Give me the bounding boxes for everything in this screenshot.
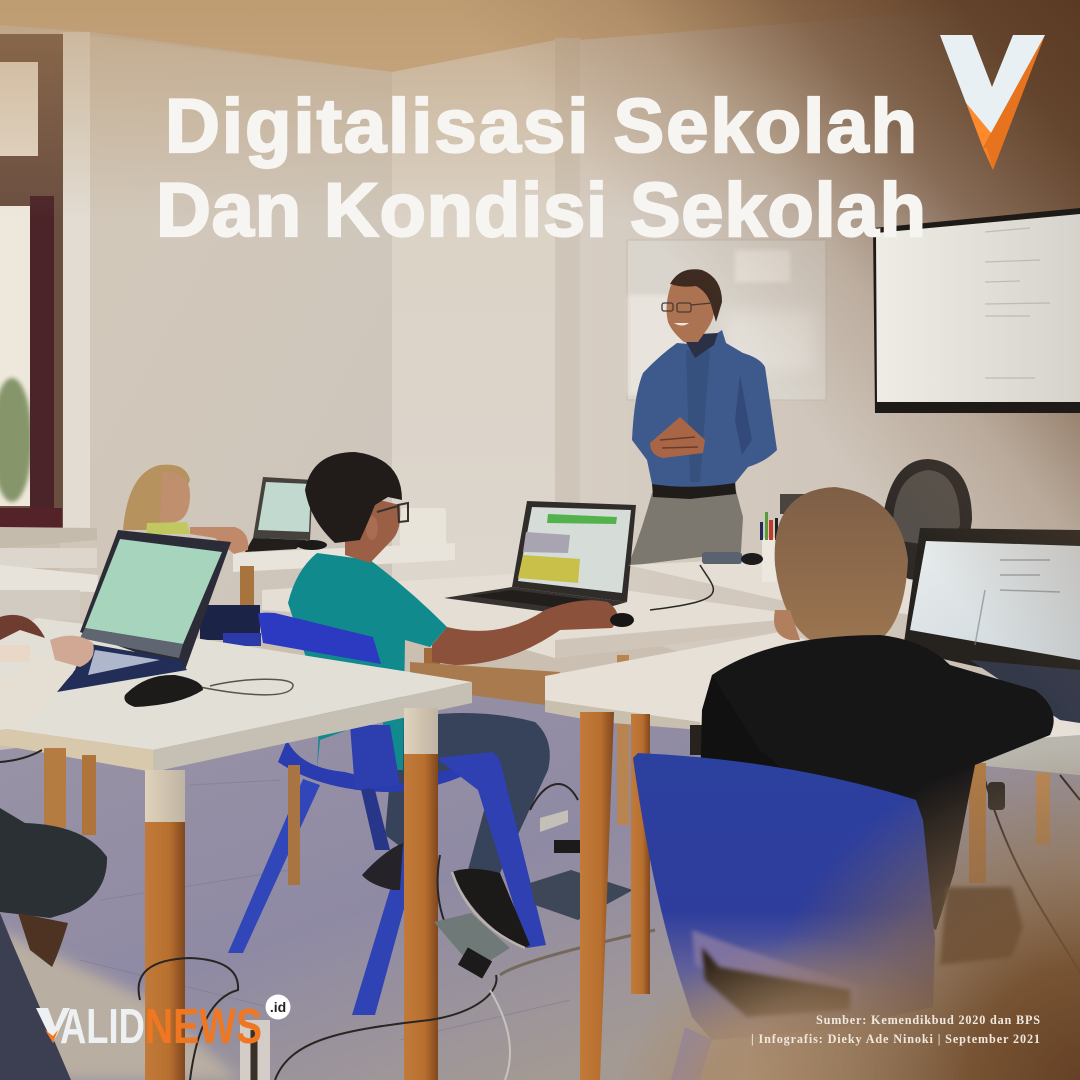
wall screen — [873, 208, 1080, 413]
table legs — [145, 770, 185, 822]
brand logo: Validnews.id: .id — [270, 999, 286, 1015]
back desk, white chair and laptop — [233, 477, 455, 608]
ceiling and walls — [0, 0, 1080, 780]
belt — [652, 481, 736, 499]
boy in black sweater — [700, 487, 1054, 965]
floor — [0, 690, 1080, 1080]
brand logo: Validnews.id: NEWS — [145, 1000, 262, 1054]
icon: Validnews V logo — [940, 35, 1045, 170]
whiteboard — [627, 240, 826, 400]
power strip and floor mat — [240, 810, 633, 1080]
mouse and cable — [200, 679, 293, 695]
hands — [650, 417, 705, 458]
black desk chair behind teacher — [880, 459, 972, 590]
title: Dan Kondisi Sekolah — [156, 168, 926, 253]
title — [156, 84, 926, 253]
front left desk — [0, 530, 472, 1080]
boy in teal shirt — [228, 452, 634, 1015]
trousers — [628, 487, 743, 566]
title: Digitalisasi Sekolah — [165, 84, 917, 169]
left student arm — [0, 653, 76, 730]
big blue chair — [633, 753, 935, 1080]
right laptop — [903, 528, 1080, 723]
central desk — [262, 574, 780, 825]
brand logo: Validnews.id: ALID — [60, 1000, 145, 1054]
left student legs — [0, 808, 107, 918]
girl at back — [123, 465, 261, 646]
floor plank lines — [80, 780, 570, 1040]
chair back over body — [258, 613, 381, 664]
shirt — [632, 330, 777, 487]
head — [667, 280, 715, 342]
desk back right — [628, 494, 915, 615]
jeans — [385, 713, 550, 873]
left background desk — [0, 565, 98, 592]
glasses — [377, 503, 408, 522]
floor cables and power strip — [0, 750, 1080, 1080]
chair seat and legs — [228, 725, 546, 1015]
source credit: Sumber: Kemendikbud 2020 dan BPS — [816, 1013, 1040, 1027]
hair — [305, 452, 402, 543]
left student chair leg — [0, 913, 71, 1080]
teacher — [628, 269, 777, 566]
neck and face — [345, 497, 400, 563]
front middle desk — [545, 632, 1080, 1080]
arm — [432, 600, 618, 665]
boot — [940, 887, 1023, 965]
left laptop — [80, 530, 231, 670]
laptop centre — [444, 501, 636, 616]
source credit: | Infografis: Dieky Ade Ninoki | September 2021 — [751, 1032, 1040, 1046]
mouse on central desk — [610, 613, 634, 627]
shoes — [452, 869, 530, 948]
torso — [288, 553, 447, 770]
brand logo: Validnews.id — [36, 994, 290, 1054]
source credit — [751, 1013, 1040, 1046]
tonal overlays — [0, 0, 1080, 220]
window — [0, 32, 97, 568]
